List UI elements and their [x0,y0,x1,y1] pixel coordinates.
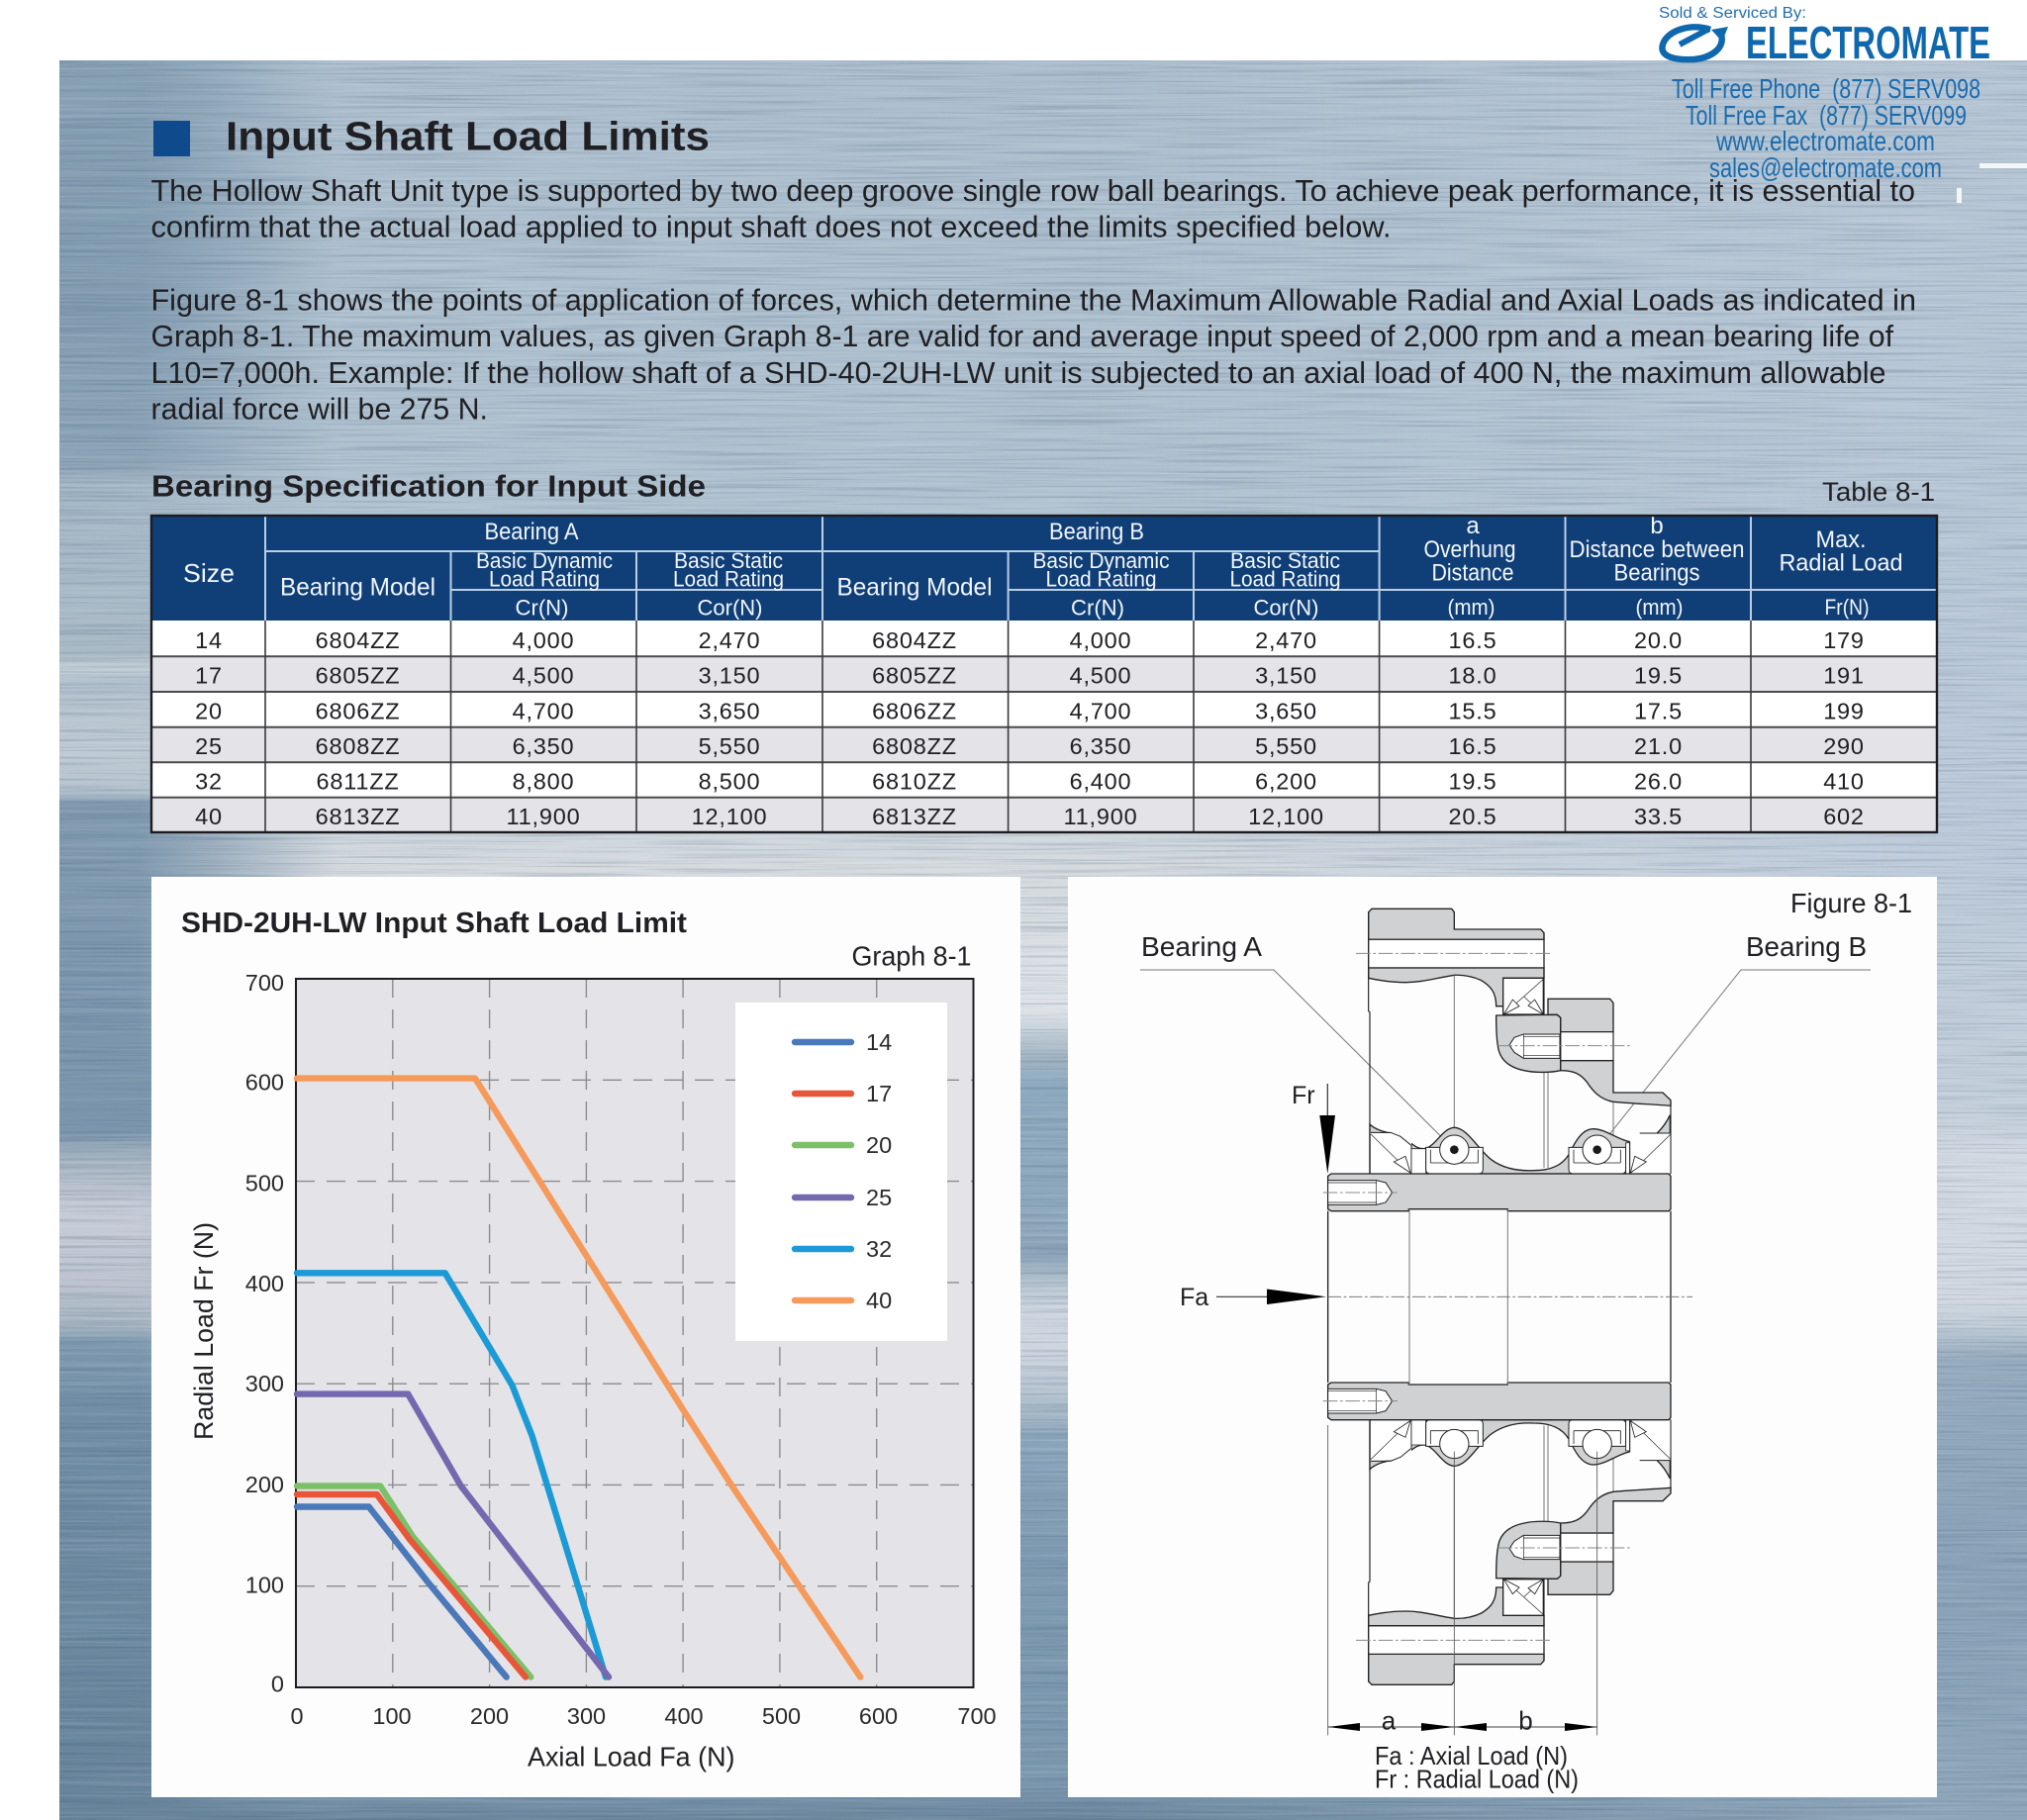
dimension b: b [1518,1706,1533,1736]
row: size 32 [195,768,1865,794]
y axis tick labels: 500 [245,1170,284,1196]
row: size 32: 6810ZZ [872,768,957,794]
row: size 20: 4,700 [1070,698,1131,723]
email: sales@electromate.com [1709,152,1942,183]
row: size 25: 16.5 [1449,733,1496,759]
row: size 32: 6,400 [1070,768,1131,794]
table header: Distance between [1570,536,1744,563]
table: bearing specification [151,513,1937,832]
plot area [296,979,974,1687]
text block: explanation: L10=7,000h. Example: If the hollow shaft of a SHD-40-2UH-LW unit is subjected to an axial load of 400 N, the maximum allowable [150,356,1886,390]
table caption: Table 8-1 [1822,477,1935,507]
table header: Max. [1815,527,1867,553]
row: size 20: 3,650 [1255,698,1317,723]
row: size 14: 4,000 [513,627,574,653]
table header: Bearing A [485,519,578,545]
row: size 40: 20.5 [1449,804,1496,829]
figure caption: Figure 8-1 [1790,888,1912,918]
table header: Basic Static [1230,548,1340,573]
arrow: radial load Fr: Fr [1292,1082,1315,1109]
row: size 17 [195,663,1865,689]
row: size 25: 6808ZZ [872,733,957,759]
dimension a: a [1382,1706,1397,1736]
row: size 32: 32 [195,768,223,794]
y axis tick labels: 600 [245,1069,284,1095]
table header: Size [183,558,235,588]
x axis tick labels: 700 [957,1703,997,1729]
table header: a [1466,513,1480,539]
row: size 40: 11,900 [507,804,580,829]
table header: Overhung [1423,536,1516,563]
x axis tick labels: 200 [470,1703,509,1729]
table header: Bearing Model [837,574,992,602]
row: size 32: 26.0 [1634,768,1683,794]
row: size 25 [195,733,1865,759]
row: size 40: 12,100 [692,804,767,829]
row: size 20: 3,650 [699,698,760,723]
row: size 40: 40 [195,804,223,829]
graph caption: Graph 8-1 [851,940,972,972]
table header: Basic Dynamic [1033,548,1170,573]
chart title: SHD-2UH-LW Input Shaft Load Limit [181,908,687,939]
table header: Load Rating [489,566,600,592]
y axis tick labels: 200 [245,1472,284,1497]
bearing A label: Bearing A [1141,931,1262,962]
legend: 40 [866,1288,892,1313]
row: size 14: 20.0 [1634,627,1683,653]
row: size 14: 4,000 [1070,627,1131,653]
text block: introduction [150,174,1915,243]
x axis tick labels: 300 [567,1703,606,1729]
bearing B label: Bearing B [1746,931,1867,962]
row: size 25: 6808ZZ [316,733,400,759]
table header: Load Rating [1229,566,1340,592]
dimension b [1454,1706,1597,1736]
row: size 20: 20 [195,698,223,723]
row: size 20: 17.5 [1634,698,1683,723]
x axis tick labels [290,1703,997,1729]
row: size 14: 179 [1823,627,1865,653]
legend [735,1003,947,1341]
row: size 32: 410 [1823,768,1865,794]
table header: Cor(N) [1253,596,1318,620]
table header: Basic Static [674,548,783,573]
header: distributor logo and contact [1659,5,1990,183]
row: size 32: 8,500 [699,768,760,794]
text block: explanation [150,283,1916,426]
row: size 40: 11,900 [1064,804,1137,829]
row: size 40: 12,100 [1248,804,1324,829]
row: size 25: 290 [1823,733,1865,759]
row: size 17: 6805ZZ [872,663,957,689]
icon: section marker square [153,121,190,156]
text block: introduction: The Hollow Shaft Unit type is supported by two deep groove single row ball bearings. To achieve peak performance, it is essential to [150,174,1915,208]
legend: load notation [1375,1741,1579,1793]
data lines [297,1079,860,1677]
row: size 20: 4,700 [513,698,574,723]
table header: Cr(N) [1071,596,1124,620]
row: size 14: 16.5 [1449,627,1496,653]
y axis tick labels: 0 [271,1671,284,1696]
row: size 32: 6811ZZ [316,768,400,794]
legend: 32 [866,1236,892,1262]
panel: bearing cross-section figure [1068,877,1937,1797]
legend: load notation: Fr : Radial Load (N) [1375,1764,1579,1793]
table header: b [1650,513,1664,539]
heading: bearing specification: Bearing Specification for Input Side [151,469,706,503]
arrow: radial load Fr [1292,1082,1335,1174]
row: size 40: 602 [1823,804,1865,829]
row: size 17: 3,150 [1255,663,1317,689]
table header: Load Rating [673,566,784,592]
y axis tick labels: 700 [245,970,284,996]
row: size 14: 2,470 [1255,627,1317,653]
title: Input Shaft Load Limits [226,113,710,158]
legend: 17 [866,1081,892,1106]
row: size 32: 19.5 [1449,768,1496,794]
sold and serviced by: Sold & Serviced By: [1659,5,1806,22]
table header: (mm) [1447,595,1495,620]
legend: 25 [866,1185,892,1210]
text block: explanation: Graph 8-1. The maximum values, as given Graph 8-1 are valid for and average input speed of 2,000 rpm and a mean bearing life of [150,320,1894,353]
row: size 20: 6806ZZ [316,698,400,723]
row: size 14: 14 [195,627,223,653]
row: size 25: 6,350 [1070,733,1131,759]
arrow: axial load Fa: Fa [1180,1284,1208,1311]
legend: 14 [866,1029,892,1055]
row: size 17: 4,500 [1070,663,1131,689]
table header: Cor(N) [697,596,762,620]
row: size 14: 2,470 [699,627,760,653]
x axis tick labels: 500 [762,1703,801,1729]
row: size 14: 6804ZZ [872,627,957,653]
row: size 17: 18.0 [1449,663,1496,689]
cross-section drawing [1323,909,1692,1735]
bearing A label [1140,931,1454,1150]
row: size 25: 25 [195,733,223,759]
y axis tick labels: 300 [245,1371,284,1396]
table header: Radial Load [1780,550,1902,576]
panel: load limit graph [151,877,1020,1797]
x axis tick labels: 100 [372,1703,412,1729]
table header: Bearing B [1049,519,1144,545]
row: size 17: 191 [1823,663,1865,689]
row: size 20: 199 [1823,698,1865,723]
y axis tick labels [245,970,284,1696]
text block: explanation: radial force will be 275 N. [150,392,488,426]
row: size 40: 6813ZZ [316,804,400,829]
row: size 40: 33.5 [1634,804,1683,829]
table header: Bearings [1613,560,1700,586]
table body background and rules [151,516,1937,832]
row: size 20: 15.5 [1449,698,1496,723]
table header: Bearing Model [280,574,435,602]
row: size 17: 19.5 [1634,663,1683,689]
y axis tick labels: 400 [245,1271,284,1296]
row: size 17: 6805ZZ [316,663,400,689]
table header: Load Rating [1045,566,1156,592]
row: size 32: 8,800 [513,768,574,794]
table header [151,513,1937,621]
row: size 25: 5,550 [1255,733,1317,759]
row: size 17: 3,150 [699,663,760,689]
legend: 20 [866,1132,892,1158]
x axis title: Axial Load Fa (N) [528,1742,734,1772]
row: size 20: 6806ZZ [872,698,957,723]
bearing B label [1597,931,1871,1150]
y axis title: Radial Load Fr (N) [189,1222,219,1440]
row: size 25: 21.0 [1634,733,1683,759]
text block: introduction: confirm that the actual load applied to input shaft does not exceed the limits specified below. [150,210,1392,243]
website: www.electromate.com [1715,126,1935,156]
icon: electromate logo [1662,27,1728,59]
table header: (mm) [1635,595,1683,620]
row: size 20 [195,698,1865,723]
x axis tick labels: 0 [290,1703,304,1729]
table header: Cr(N) [515,596,568,620]
arrow: axial load Fa [1180,1284,1326,1311]
row: size 14: 6804ZZ [316,627,400,653]
row: size 32: 6,200 [1255,768,1317,794]
row: size 17: 4,500 [513,663,574,689]
legend: load notation: Fa : Axial Load (N) [1375,1741,1568,1771]
row: size 17: 17 [195,663,223,689]
table header: Basic Dynamic [476,548,613,573]
text block: explanation: Figure 8-1 shows the points of application of forces, which determine the Maximum Allowable Radial and Axial Loads as indicated in [150,283,1916,317]
table header: Distance [1431,560,1514,586]
x axis tick labels: 400 [664,1703,704,1729]
row: size 14 [195,627,1865,653]
row: size 40: 6813ZZ [872,804,957,829]
row: size 25: 5,550 [699,733,760,759]
dimension a [1328,1706,1454,1736]
y axis tick labels: 100 [245,1572,284,1597]
row: size 25: 6,350 [513,733,574,759]
x axis tick labels: 600 [859,1703,898,1729]
row: size 40 [195,804,1865,829]
table header: Fr(N) [1825,595,1869,620]
